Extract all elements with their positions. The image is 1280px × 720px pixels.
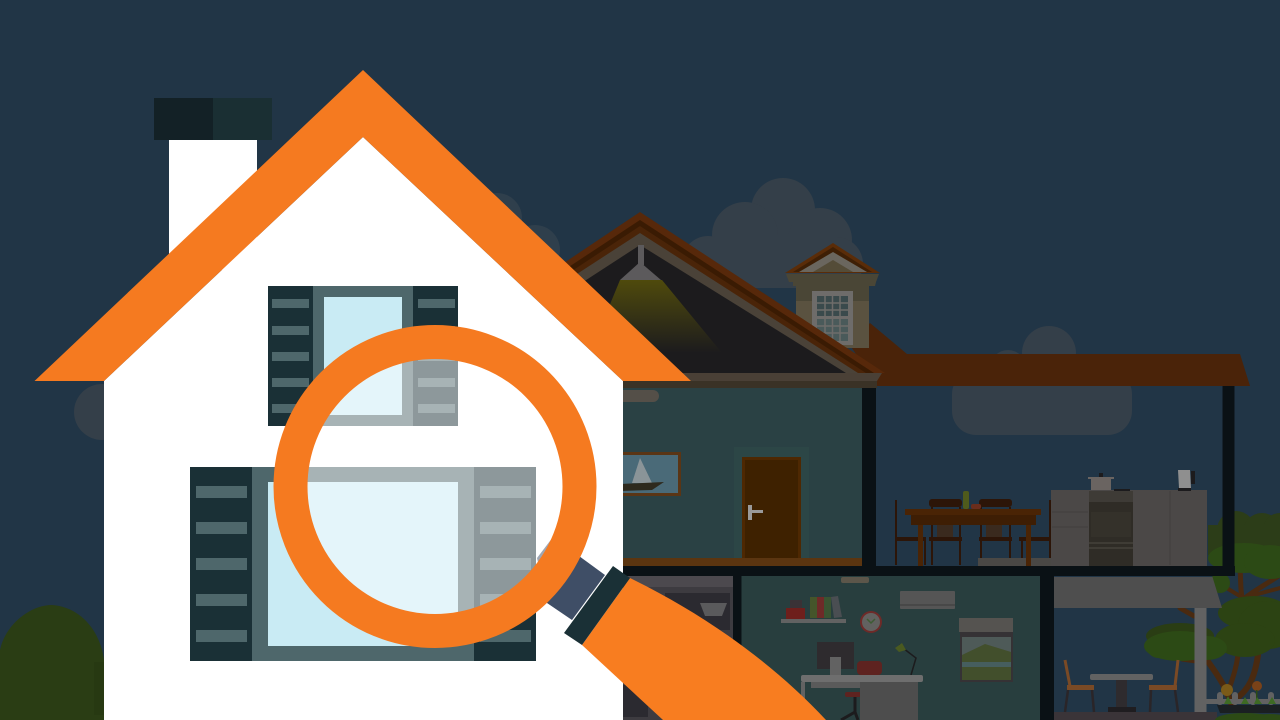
office chair [841, 661, 882, 720]
patio table [1090, 674, 1153, 712]
white house [34, 70, 691, 720]
dining set [895, 491, 1051, 566]
wall light [610, 390, 659, 402]
patio chair left [1065, 660, 1094, 712]
office room [741, 576, 1040, 720]
planter [1217, 705, 1280, 713]
desk lamp [895, 643, 916, 675]
air conditioner [900, 591, 955, 609]
ground floor wall [620, 388, 862, 566]
patio [1054, 577, 1222, 720]
rug [978, 558, 1051, 566]
cornice [600, 373, 882, 388]
monitor [817, 642, 854, 675]
clouds [74, 178, 1132, 440]
flowers [1221, 681, 1276, 704]
tree: trunks [1180, 570, 1280, 706]
stovetop pan [1114, 489, 1130, 491]
painting [620, 452, 681, 496]
upper window: right slats [418, 299, 455, 413]
magnifier: collar [564, 566, 630, 645]
chimney: stack [169, 140, 257, 270]
desk [801, 675, 923, 720]
magnifier: ring [290, 342, 580, 631]
ground shrub [1215, 713, 1280, 720]
oven [1089, 491, 1133, 566]
lower window: left slats [196, 486, 247, 642]
bush: left [0, 605, 104, 720]
upper window [268, 286, 458, 426]
kettle [1178, 470, 1195, 491]
attic roof [540, 212, 885, 373]
fence [1206, 692, 1280, 705]
lower window: glass [268, 482, 458, 646]
awning [1054, 577, 1222, 608]
magnifier: handle [582, 578, 826, 720]
magnifier: neck [537, 537, 605, 620]
ceiling light [841, 577, 869, 583]
magnifier: lens [307, 358, 563, 614]
right roof [850, 323, 1250, 386]
dormer: cornice [786, 274, 879, 286]
roof: inner frame [540, 233, 858, 373]
magnifying glass [290, 342, 826, 720]
attic interior [540, 245, 846, 373]
shelf with binders [781, 596, 846, 623]
dormer: window [812, 291, 853, 345]
kitchen [1051, 470, 1207, 566]
bottle and apple [963, 491, 981, 509]
chimney [154, 98, 272, 270]
dormer [785, 243, 880, 348]
chairs [895, 499, 1051, 565]
dormer: body [796, 286, 869, 348]
chimney: cap [154, 98, 213, 140]
house frame beams [620, 386, 1235, 720]
roof: outer brown [540, 212, 885, 373]
floor strip [620, 558, 862, 566]
lower left room [620, 576, 733, 720]
house: orange roof [34, 70, 691, 381]
tree [1144, 511, 1280, 706]
column [1194, 608, 1206, 712]
upper window: glass [324, 297, 402, 415]
door [734, 447, 809, 558]
pot [1088, 473, 1114, 490]
patio chair right [1149, 660, 1178, 712]
ground [1054, 712, 1217, 720]
lower window [190, 467, 536, 661]
door handle [748, 505, 763, 520]
window with blind [959, 618, 1013, 682]
attic lamp beam [590, 280, 722, 353]
upper window: left slats [272, 299, 309, 413]
table [905, 509, 1041, 566]
tree: foliage [1208, 511, 1280, 555]
attic lamp [620, 245, 661, 280]
lower window: right slats [480, 486, 531, 642]
cabinets [1051, 490, 1207, 566]
house: walls [104, 137, 623, 720]
dormer: roof [785, 243, 880, 273]
garden flowers [1206, 681, 1280, 720]
clock [860, 611, 882, 633]
roof: dark stripe [540, 220, 874, 373]
